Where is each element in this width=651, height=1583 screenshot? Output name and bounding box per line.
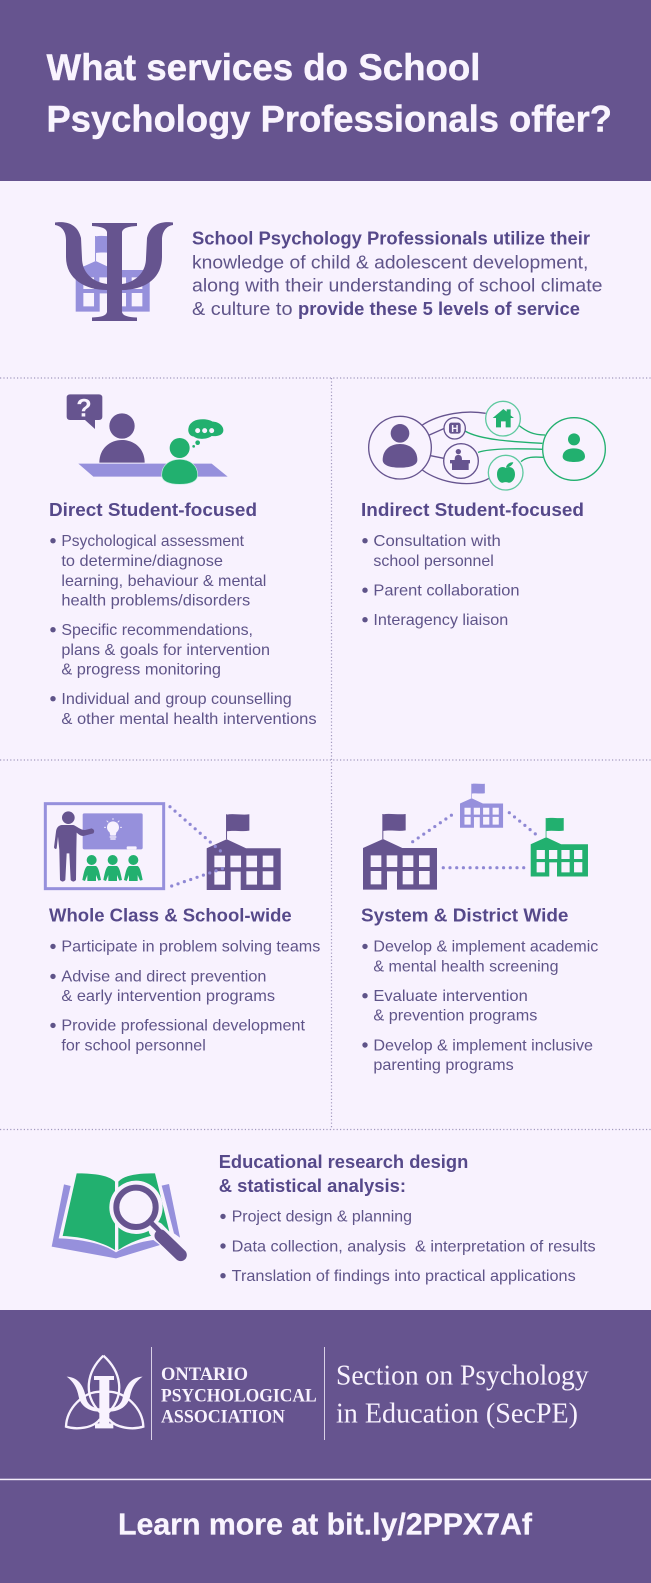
title [46, 47, 612, 140]
logo wordmark dividers [152, 1347, 324, 1440]
bullet list: direct services: Psychological assessment [61, 533, 245, 550]
icon: psi symbol with school [55, 222, 173, 321]
heading: educational research design: & statistical analysis: [219, 1175, 406, 1196]
icon: student and professional at a table [67, 394, 228, 484]
bullet list: whole class services: & early intervention programs [61, 988, 275, 1005]
bullet list: direct services: Specific recommendations, [61, 622, 253, 639]
icon: open book with magnifying glass [52, 1173, 181, 1258]
icon: three linked schools [363, 784, 588, 890]
bullet list: research services: Project design & planning [232, 1209, 412, 1226]
bullet list: indirect services: school personnel [373, 553, 494, 570]
bullet list: system services [362, 939, 598, 1074]
bullet list: research services: Translation of findings into practical applications [232, 1268, 576, 1285]
bullet list: direct services: to determine/diagnose [61, 553, 223, 570]
bullet list: whole class services: Provide professional development [61, 1018, 306, 1035]
heading: whole class and school-wide: Whole Class & School-wide [49, 905, 292, 926]
bullet list: indirect services [362, 533, 520, 629]
logo wordmark: Ontario Psychological Association: ONTARIO [161, 1364, 248, 1385]
bullet list: direct services: plans & goals for intervention [61, 642, 270, 659]
section name: Section on Psychology [336, 1360, 589, 1391]
title: Psychology Professionals offer? [46, 99, 612, 140]
title: What services do School [46, 47, 480, 88]
panel: system and district wide [361, 784, 598, 1074]
bullet list: direct services: & other mental health interventions [61, 711, 317, 728]
heading: indirect student-focused: Indirect Student-focused [361, 499, 584, 520]
bullet list: system services: Develop & implement academic [373, 939, 598, 956]
bullet list: direct services: learning, behaviour & mental [61, 573, 266, 590]
bullet list: whole class services: Participate in problem solving teams [61, 939, 320, 956]
logo: Ontario Psychological Association emblem [66, 1356, 143, 1428]
bullet list: system services: parenting programs [373, 1057, 514, 1074]
section name [336, 1360, 589, 1429]
footer panel [0, 1310, 651, 1583]
bullet list: direct services: health problems/disorders [61, 593, 250, 610]
header panel [0, 0, 651, 181]
section name: in Education (SecPE) [336, 1398, 578, 1429]
bullet list: whole class services [50, 939, 320, 1054]
logo wordmark: Ontario Psychological Association: ASSOCIATION [161, 1406, 285, 1427]
logo wordmark: Ontario Psychological Association [161, 1364, 317, 1427]
panel: whole class and school-wide [45, 804, 320, 1054]
intro text: along with their understanding of school climate [192, 276, 602, 296]
bullet list: system services: & prevention programs [373, 1008, 537, 1025]
bullet list: system services: Evaluate intervention [373, 988, 528, 1005]
bullet list: indirect services: Interagency liaison [373, 612, 508, 629]
bullet list: direct services: & progress monitoring [61, 662, 221, 679]
call to action: learn more link: Learn more at bit.ly/2PPX7Af [118, 1506, 533, 1541]
icon: network linking people, hospital, desk, home and school [369, 401, 605, 490]
bullet list: direct services: Individual and group counselling [61, 691, 292, 708]
heading: direct student-focused: Direct Student-focused [49, 499, 257, 520]
bullet list: indirect services: Parent collaboration [373, 582, 520, 600]
intro text [192, 228, 602, 319]
bullet list: system services: & mental health screening [373, 958, 558, 975]
panel: direct student-focused [49, 394, 317, 728]
intro text: provide these 5 levels of service [298, 299, 580, 319]
bullet list: whole class services: Advise and direct prevention [61, 969, 266, 986]
panel: introduction [55, 222, 602, 321]
intro text: School Psychology Professionals utilize their [192, 228, 590, 248]
intro text: knowledge of child & adolescent development, [192, 252, 588, 272]
heading: system and district wide: System & District Wide [361, 905, 568, 926]
panel: educational research [52, 1151, 596, 1285]
bullet list: system services: Develop & implement inclusive [373, 1037, 593, 1054]
panel: indirect student-focused [361, 401, 605, 629]
bullet list: whole class services: for school personnel [61, 1037, 206, 1054]
logo wordmark: Ontario Psychological Association: PSYCHOLOGICAL [161, 1386, 317, 1407]
icon: student and professional at a table: ? [76, 395, 92, 423]
intro text: & culture to [192, 299, 292, 319]
bullet list: research services [220, 1209, 596, 1285]
icon: classroom linked to school [45, 804, 281, 890]
heading: educational research design: Educational research design [219, 1151, 468, 1172]
icon: network linking people, hospital, desk, home and school: H [451, 424, 458, 435]
bullet list: research services: Data collection, analysis & interpretation of results [232, 1238, 596, 1255]
heading: educational research design [219, 1151, 468, 1196]
bullet list: direct services [50, 533, 317, 728]
bullet list: indirect services: Consultation with [373, 533, 501, 550]
